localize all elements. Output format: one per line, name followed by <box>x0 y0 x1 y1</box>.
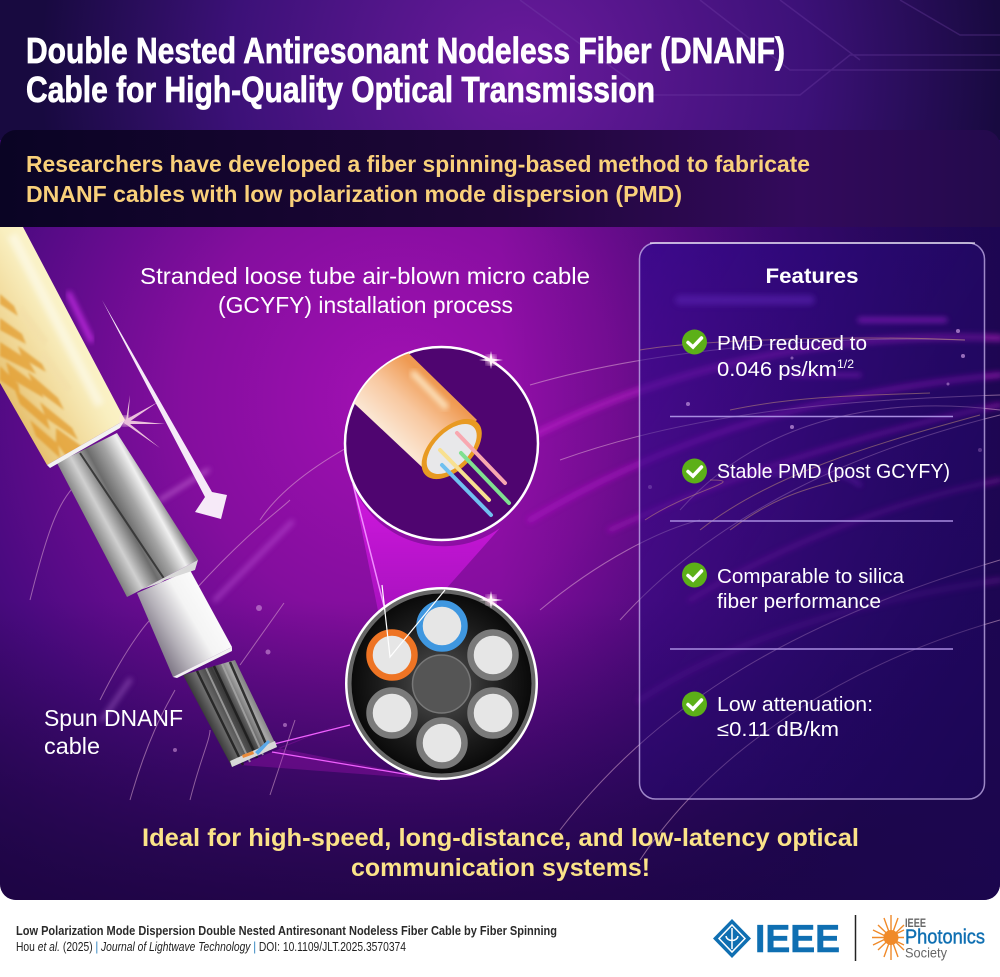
logo: IEEE Photonics Society <box>872 915 985 960</box>
coloured fibres <box>440 433 509 515</box>
feature 1 <box>682 330 867 381</box>
cable illustration <box>0 227 277 767</box>
cable: white wrap <box>137 570 232 678</box>
cable: core bundle <box>183 660 277 767</box>
logo: IEEE <box>713 918 840 961</box>
feature 1: PMD reduced to <box>717 333 867 355</box>
feature 2: Stable PMD (post GCYFY) <box>717 461 950 483</box>
cable: grey sheath <box>57 433 198 597</box>
panel: features <box>640 243 984 799</box>
orange tube <box>354 353 477 467</box>
logo: IEEE: IEEE <box>755 918 840 961</box>
feature 1: 1/2 <box>837 357 854 371</box>
cone: enlargement beam between circles <box>240 482 500 780</box>
feature 1: 0.046 ps/km <box>717 359 837 381</box>
tube: blue <box>420 604 464 648</box>
circle: fiber tube detail <box>340 340 538 540</box>
feature 3: fiber performance <box>717 591 881 613</box>
arrow <box>102 300 227 519</box>
subtitle <box>26 151 810 207</box>
logo: IEEE Photonics Society: IEEE <box>905 916 926 930</box>
citation: Hou et al. (2025) | Journal of Lightwave Technology | DOI: 10.1109/JLT.2025.3570374 <box>16 940 406 954</box>
feature 3 <box>682 562 905 613</box>
subtitle: Researchers have developed a fiber spinning-based method to fabricate <box>26 151 810 177</box>
tubes: grey <box>370 632 516 766</box>
conclusion <box>142 824 859 882</box>
subtitle: DNANF cables with low polarization mode dispersion (PMD) <box>26 181 682 207</box>
conclusion: communication systems! <box>351 854 650 882</box>
feature 4: Low attenuation: <box>717 694 873 716</box>
feature 4: ≤0.11 dB/km <box>717 719 839 741</box>
label: installation process <box>140 263 590 318</box>
dividers <box>670 416 953 649</box>
label: spun DNANF cable: Spun DNANF <box>44 705 183 731</box>
title <box>26 30 785 110</box>
sparkles on circles <box>479 351 503 609</box>
citation: Low Polarization Mode Dispersion Double Nested Antiresonant Nodeless Fiber Cable by Fiber Spinning <box>16 923 557 938</box>
citation <box>16 923 557 954</box>
cable: yellow jacket <box>0 227 125 468</box>
feature 4 <box>682 692 873 741</box>
logo: IEEE Photonics Society: Society <box>905 944 947 960</box>
sparkle on cable <box>120 395 165 448</box>
circle: cable cross-section <box>345 585 538 780</box>
label: spun DNANF cable <box>44 705 183 759</box>
feature 3: Comparable to silica <box>717 566 905 588</box>
logo divider <box>854 915 856 961</box>
logo: IEEE Photonics Society: Photonics <box>905 926 985 948</box>
label: spun DNANF cable: cable <box>44 733 100 759</box>
title: Double Nested Antiresonant Nodeless Fiber (DNANF) <box>26 30 785 71</box>
header band <box>0 130 1000 227</box>
tube: orange <box>370 632 414 678</box>
label: installation process: Stranded loose tube air-blown micro cable <box>140 263 590 289</box>
heading: features: Features <box>766 264 859 288</box>
conclusion: Ideal for high-speed, long-distance, and low-latency optical <box>142 824 859 852</box>
label: installation process: (GCYFY) installation process <box>218 292 513 318</box>
title: Cable for High-Quality Optical Transmission <box>26 69 655 110</box>
